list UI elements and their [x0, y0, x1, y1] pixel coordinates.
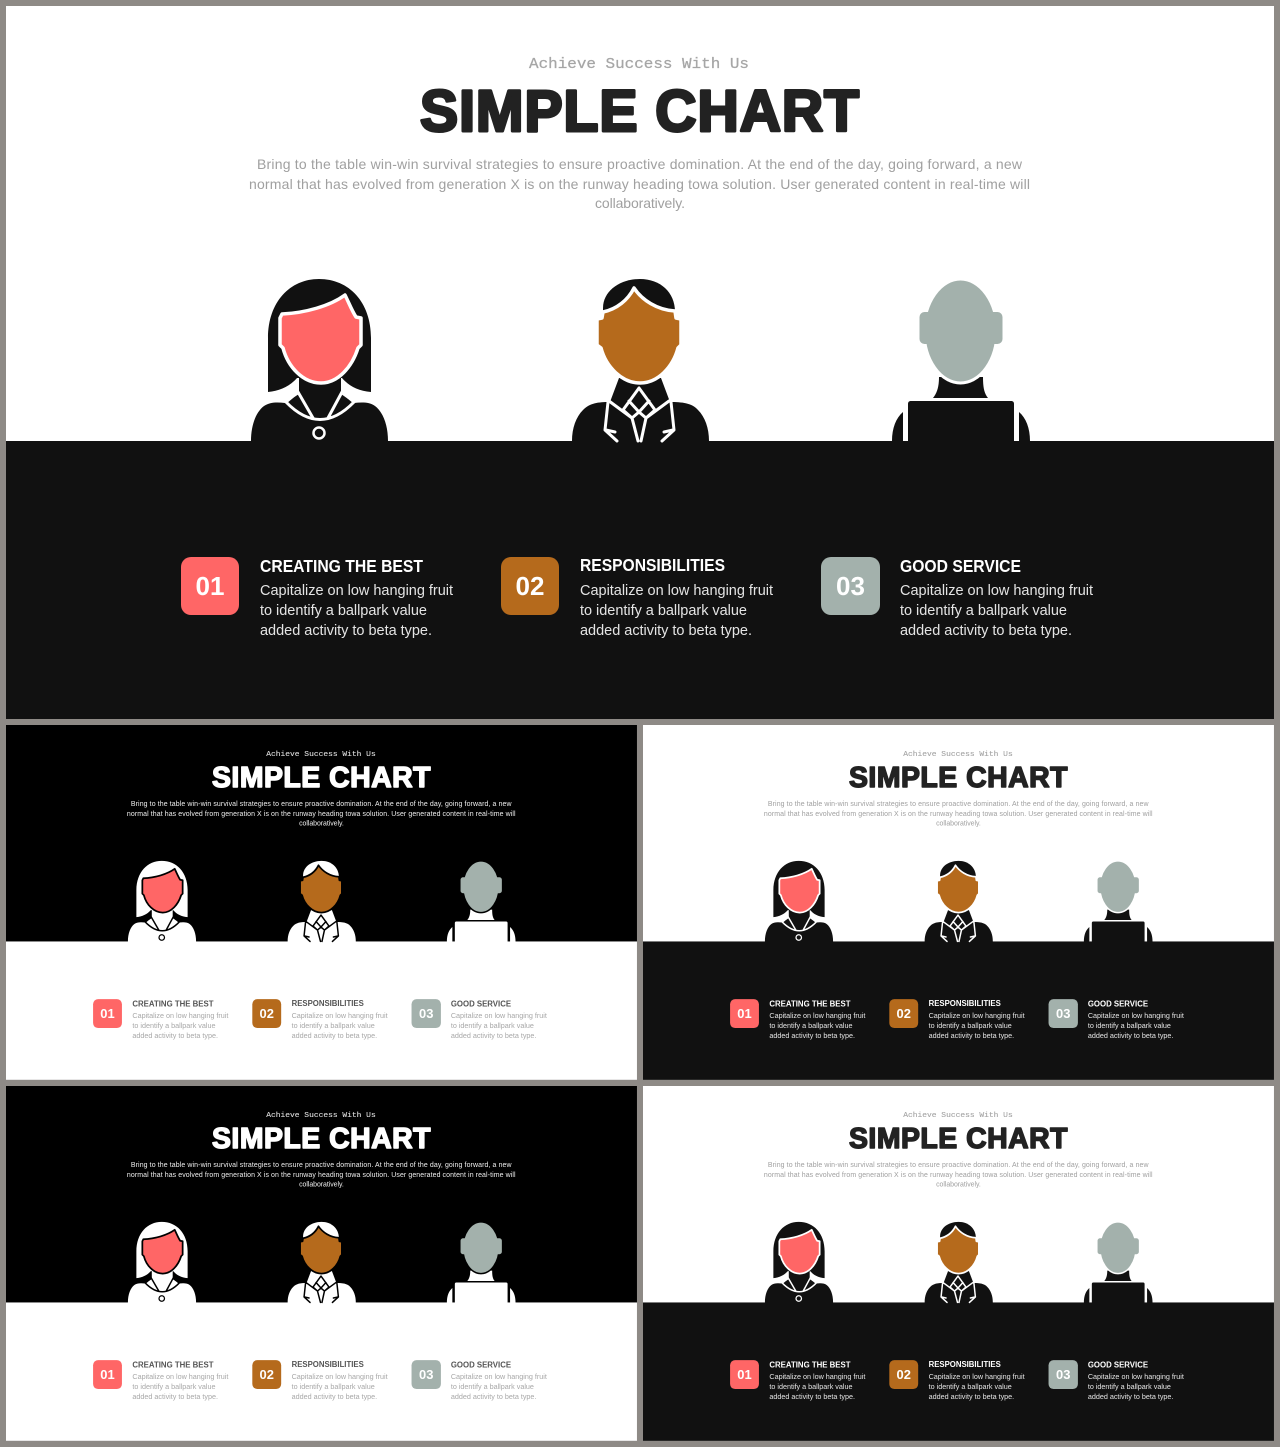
icon: woman avatar	[765, 861, 833, 941]
item 03: added activity to beta type.	[1088, 1392, 1173, 1401]
title: SIMPLE CHART	[212, 1123, 431, 1155]
panel: thumbnail light bottom-right	[643, 1086, 1274, 1441]
item 02: Capitalize on low hanging fruit	[929, 1372, 1025, 1381]
item 01: to identify a ballpark value	[260, 603, 427, 619]
item 01: 01	[737, 1006, 752, 1021]
icon: man in suit avatar	[288, 861, 356, 941]
intro paragraph: normal that has evolved from generation X is on the runway heading towa solution. User generated content in real-time will	[764, 811, 1153, 818]
item 02: 02	[897, 1367, 911, 1382]
item 01: to identify a ballpark value	[769, 1021, 852, 1030]
item 03: Capitalize on low hanging fruit	[451, 1372, 547, 1381]
item 03: 03	[1056, 1006, 1070, 1021]
icon: person at laptop avatar	[892, 279, 1030, 441]
item 02: RESPONSIBILITIES	[929, 1359, 1001, 1369]
item 02: to identify a ballpark value	[929, 1382, 1012, 1391]
item 03	[1049, 999, 1184, 1040]
item 01: to identify a ballpark value	[769, 1382, 852, 1391]
icon: person at laptop avatar	[447, 861, 516, 941]
item 02: to identify a ballpark value	[929, 1021, 1012, 1030]
item 01: Capitalize on low hanging fruit	[260, 583, 453, 599]
item 02: Capitalize on low hanging fruit	[929, 1011, 1025, 1020]
item 01: Capitalize on low hanging fruit	[769, 1011, 865, 1020]
icon: man in suit avatar	[925, 861, 993, 941]
item 03	[412, 1360, 547, 1401]
item 02: 02	[897, 1006, 911, 1021]
intro paragraph	[249, 156, 1030, 211]
item 03: GOOD SERVICE	[1088, 999, 1148, 1009]
item 01: to identify a ballpark value	[132, 1382, 215, 1391]
item 02: 02	[516, 571, 544, 601]
item 02: 02	[260, 1006, 274, 1021]
item 03: GOOD SERVICE	[451, 999, 511, 1009]
item 01: to identify a ballpark value	[132, 1021, 215, 1030]
title: SIMPLE CHART	[849, 1123, 1068, 1155]
intro paragraph: collaboratively.	[936, 821, 981, 828]
intro paragraph: collaboratively.	[936, 1182, 981, 1189]
item 01: 01	[100, 1367, 115, 1382]
item 02: RESPONSIBILITIES	[580, 555, 725, 575]
item 02: RESPONSIBILITIES	[292, 1359, 364, 1369]
icon: woman avatar	[128, 861, 196, 941]
item 01	[93, 1360, 228, 1401]
intro paragraph	[764, 801, 1153, 828]
item 01: added activity to beta type.	[260, 623, 432, 639]
intro paragraph: collaboratively.	[299, 821, 344, 828]
item 02: to identify a ballpark value	[580, 603, 747, 619]
item 03: GOOD SERVICE	[451, 1360, 511, 1370]
icon: man in suit avatar	[572, 279, 709, 441]
item 01: CREATING THE BEST	[260, 556, 423, 576]
intro paragraph: normal that has evolved from generation X is on the runway heading towa solution. User generated content in real-time will	[249, 176, 1030, 192]
eyebrow text: Achieve Success With Us	[903, 751, 1013, 759]
item 03: added activity to beta type.	[900, 623, 1072, 639]
item 02: 02	[260, 1367, 274, 1382]
item 01	[181, 556, 453, 639]
item 03: to identify a ballpark value	[451, 1021, 534, 1030]
panel: thumbnail light top-right	[643, 725, 1274, 1080]
intro paragraph	[127, 1162, 516, 1189]
item 03: 03	[1056, 1367, 1070, 1382]
item 02: Capitalize on low hanging fruit	[292, 1372, 388, 1381]
item 03: 03	[419, 1006, 433, 1021]
item 02	[252, 998, 388, 1040]
item 01: added activity to beta type.	[132, 1392, 218, 1401]
item 01: CREATING THE BEST	[769, 1360, 851, 1370]
panel: main slide light	[6, 6, 1274, 719]
item 02	[889, 998, 1025, 1040]
item 02: added activity to beta type.	[929, 1031, 1014, 1040]
item 03: to identify a ballpark value	[900, 603, 1067, 619]
item 03: added activity to beta type.	[451, 1392, 536, 1401]
item 03: GOOD SERVICE	[1088, 1360, 1148, 1370]
intro paragraph: normal that has evolved from generation X is on the runway heading towa solution. User generated content in real-time will	[127, 811, 516, 818]
icon: man in suit avatar	[288, 1222, 356, 1302]
intro paragraph	[127, 801, 516, 828]
item 01: 01	[100, 1006, 115, 1021]
icon: man in suit avatar	[925, 1222, 993, 1302]
intro paragraph	[764, 1162, 1153, 1189]
icon: person at laptop avatar	[1084, 861, 1153, 941]
eyebrow text: Achieve Success With Us	[266, 1112, 376, 1120]
item 03	[1049, 1360, 1184, 1401]
intro paragraph: collaboratively.	[299, 1182, 344, 1189]
panel: thumbnail dark bottom-left	[6, 1086, 637, 1441]
item 03: Capitalize on low hanging fruit	[1088, 1372, 1184, 1381]
item 03	[821, 556, 1093, 639]
item 02: added activity to beta type.	[580, 623, 752, 639]
item 03	[412, 999, 547, 1040]
item 02: RESPONSIBILITIES	[292, 998, 364, 1008]
intro paragraph: Bring to the table win-win survival strategies to ensure proactive domination. At the end of the day, going forward, a new	[257, 156, 1023, 172]
item 03: to identify a ballpark value	[1088, 1382, 1171, 1391]
item 03: GOOD SERVICE	[900, 556, 1021, 576]
item 01: CREATING THE BEST	[132, 999, 214, 1009]
item 02: added activity to beta type.	[292, 1031, 377, 1040]
item 01: Capitalize on low hanging fruit	[132, 1372, 228, 1381]
item 01: Capitalize on low hanging fruit	[132, 1011, 228, 1020]
icon: person at laptop avatar	[1084, 1222, 1153, 1302]
item 02: added activity to beta type.	[292, 1392, 377, 1401]
item 01: CREATING THE BEST	[132, 1360, 214, 1370]
eyebrow text: Achieve Success With Us	[903, 1112, 1013, 1120]
icon: woman avatar	[765, 1222, 833, 1302]
item 01	[730, 1360, 865, 1401]
icon: person at laptop avatar	[447, 1222, 516, 1302]
item 03: Capitalize on low hanging fruit	[900, 583, 1093, 599]
item 03: Capitalize on low hanging fruit	[451, 1011, 547, 1020]
intro paragraph: Bring to the table win-win survival strategies to ensure proactive domination. At the end of the day, going forward, a new	[768, 1162, 1150, 1169]
item 03: to identify a ballpark value	[1088, 1021, 1171, 1030]
item 03: Capitalize on low hanging fruit	[1088, 1011, 1184, 1020]
item 02: Capitalize on low hanging fruit	[292, 1011, 388, 1020]
item 01: Capitalize on low hanging fruit	[769, 1372, 865, 1381]
item 02	[889, 1359, 1025, 1401]
item 02: RESPONSIBILITIES	[929, 998, 1001, 1008]
item 02	[252, 1359, 388, 1401]
item 02: to identify a ballpark value	[292, 1382, 375, 1391]
title: SIMPLE CHART	[212, 762, 431, 794]
item 03: 03	[836, 571, 865, 601]
item 01: added activity to beta type.	[769, 1031, 855, 1040]
item 01: 01	[196, 571, 224, 601]
panel: thumbnail dark top-left	[6, 725, 637, 1080]
eyebrow text: Achieve Success With Us	[266, 751, 376, 759]
intro paragraph: collaboratively.	[595, 195, 685, 211]
item 02: Capitalize on low hanging fruit	[580, 583, 773, 599]
item 01: added activity to beta type.	[132, 1031, 218, 1040]
item 03: added activity to beta type.	[1088, 1031, 1173, 1040]
item 01: 01	[737, 1367, 752, 1382]
item 02	[501, 555, 773, 639]
icon: woman avatar	[251, 279, 388, 441]
item 01	[93, 999, 228, 1040]
item 02: added activity to beta type.	[929, 1392, 1014, 1401]
icon: woman avatar	[128, 1222, 196, 1302]
item 03: 03	[419, 1367, 433, 1382]
item 01: CREATING THE BEST	[769, 999, 851, 1009]
title: SIMPLE CHART	[849, 762, 1068, 794]
item 02: to identify a ballpark value	[292, 1021, 375, 1030]
title: SIMPLE CHART	[420, 79, 860, 144]
intro paragraph: Bring to the table win-win survival strategies to ensure proactive domination. At the end of the day, going forward, a new	[131, 1162, 513, 1169]
item 03: to identify a ballpark value	[451, 1382, 534, 1391]
item 01	[730, 999, 865, 1040]
intro paragraph: Bring to the table win-win survival strategies to ensure proactive domination. At the end of the day, going forward, a new	[768, 801, 1150, 808]
intro paragraph: Bring to the table win-win survival strategies to ensure proactive domination. At the end of the day, going forward, a new	[131, 801, 513, 808]
item 01: added activity to beta type.	[769, 1392, 855, 1401]
intro paragraph: normal that has evolved from generation X is on the runway heading towa solution. User generated content in real-time will	[764, 1172, 1153, 1179]
intro paragraph: normal that has evolved from generation X is on the runway heading towa solution. User generated content in real-time will	[127, 1172, 516, 1179]
item 03: added activity to beta type.	[451, 1031, 536, 1040]
eyebrow text: Achieve Success With Us	[529, 56, 749, 73]
